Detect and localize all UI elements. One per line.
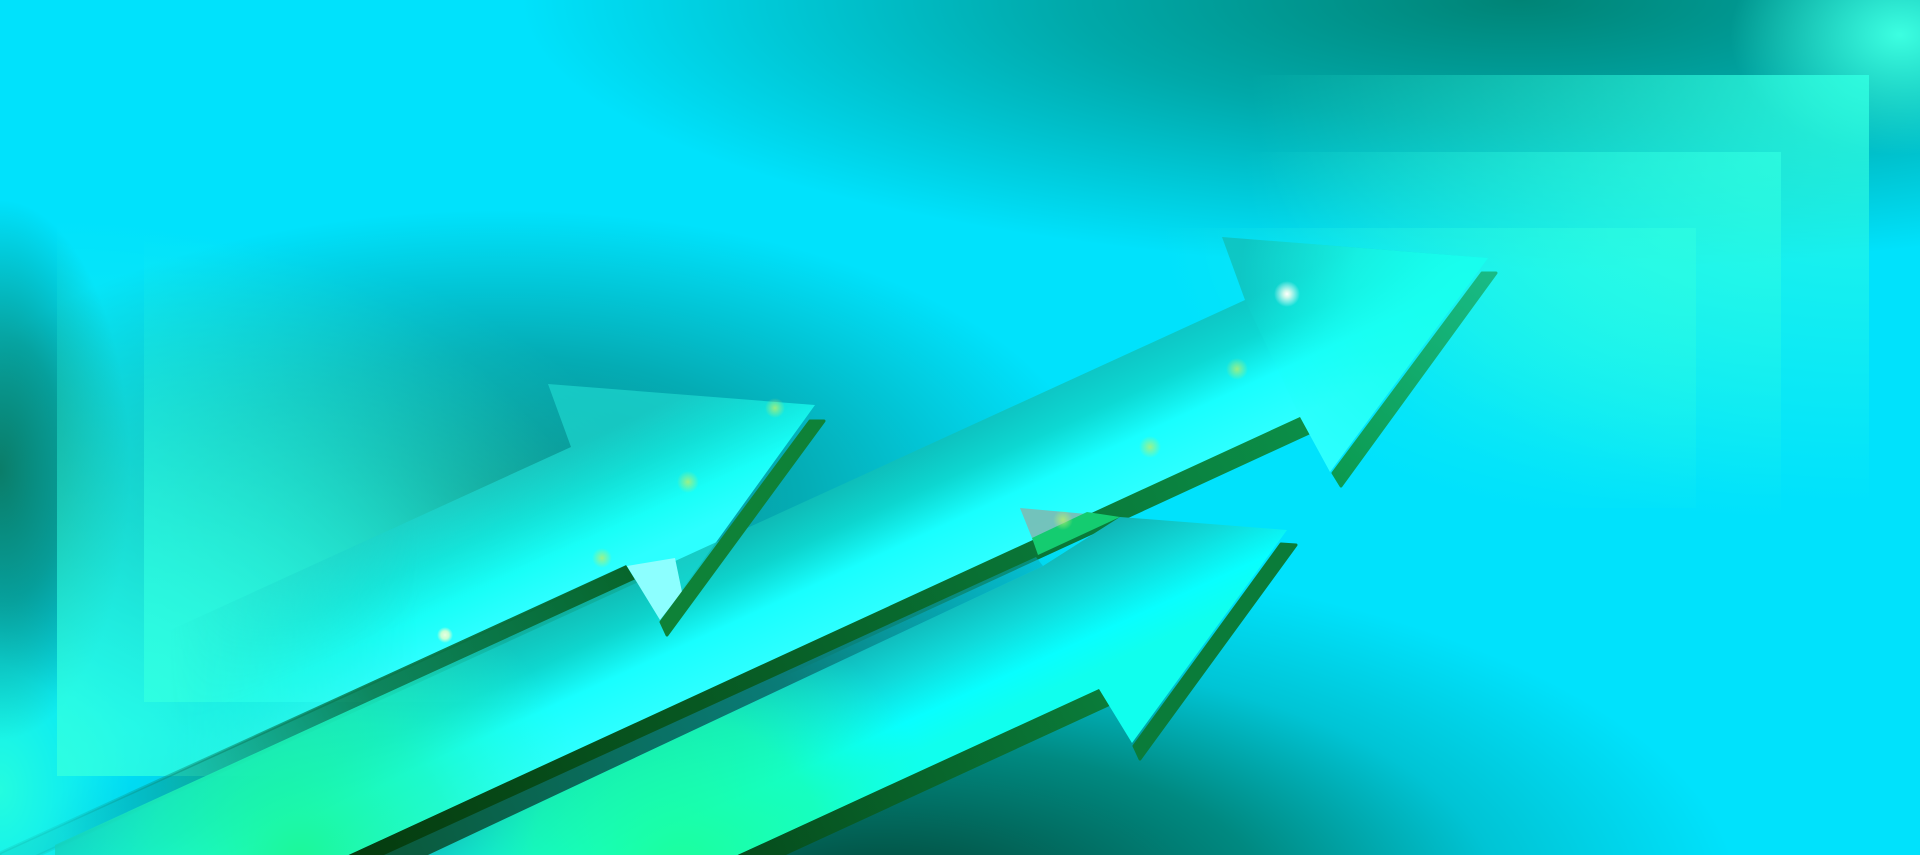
- arrow shadow: large arrow edges: [342, 273, 1496, 855]
- arrow body: small arrow, fading to the left: [205, 384, 815, 758]
- frame: outer rectangle: [57, 75, 1869, 776]
- arrow body: lower arrow: [424, 517, 1287, 855]
- arrow: lower arrow: [384, 508, 1296, 855]
- arrows illustration: [0, 237, 1498, 855]
- arrow glow: lower arrow green tail: [424, 566, 1099, 855]
- arrow: large centre arrow: [55, 237, 1496, 855]
- arrow head highlight: large arrow: [1222, 237, 1488, 472]
- arrow shadow: small arrow right edge: [661, 421, 824, 635]
- glow: green left light: [160, 640, 540, 855]
- arrow: small upper arrow: [0, 384, 815, 855]
- sparkle points: [437, 281, 1300, 643]
- arrow glow: large arrow green tail: [55, 300, 1300, 855]
- arrow shadow: small arrow lower edge: [0, 566, 637, 855]
- arrow barb: lower arrow translucent corner: [1020, 508, 1087, 538]
- highlight: green band overlap: [1032, 512, 1120, 555]
- frame: middle rectangle: [144, 152, 1781, 702]
- arrow cast shadow: lower arrow: [384, 557, 1043, 855]
- frame: inner rectangle: [1000, 228, 1696, 508]
- arrow shadow: lower arrow edges: [733, 544, 1296, 855]
- lens tip of small arrow: [627, 558, 682, 620]
- arrow body: large arrow: [55, 237, 1488, 855]
- small arrow overlap on large arrow: [627, 421, 824, 635]
